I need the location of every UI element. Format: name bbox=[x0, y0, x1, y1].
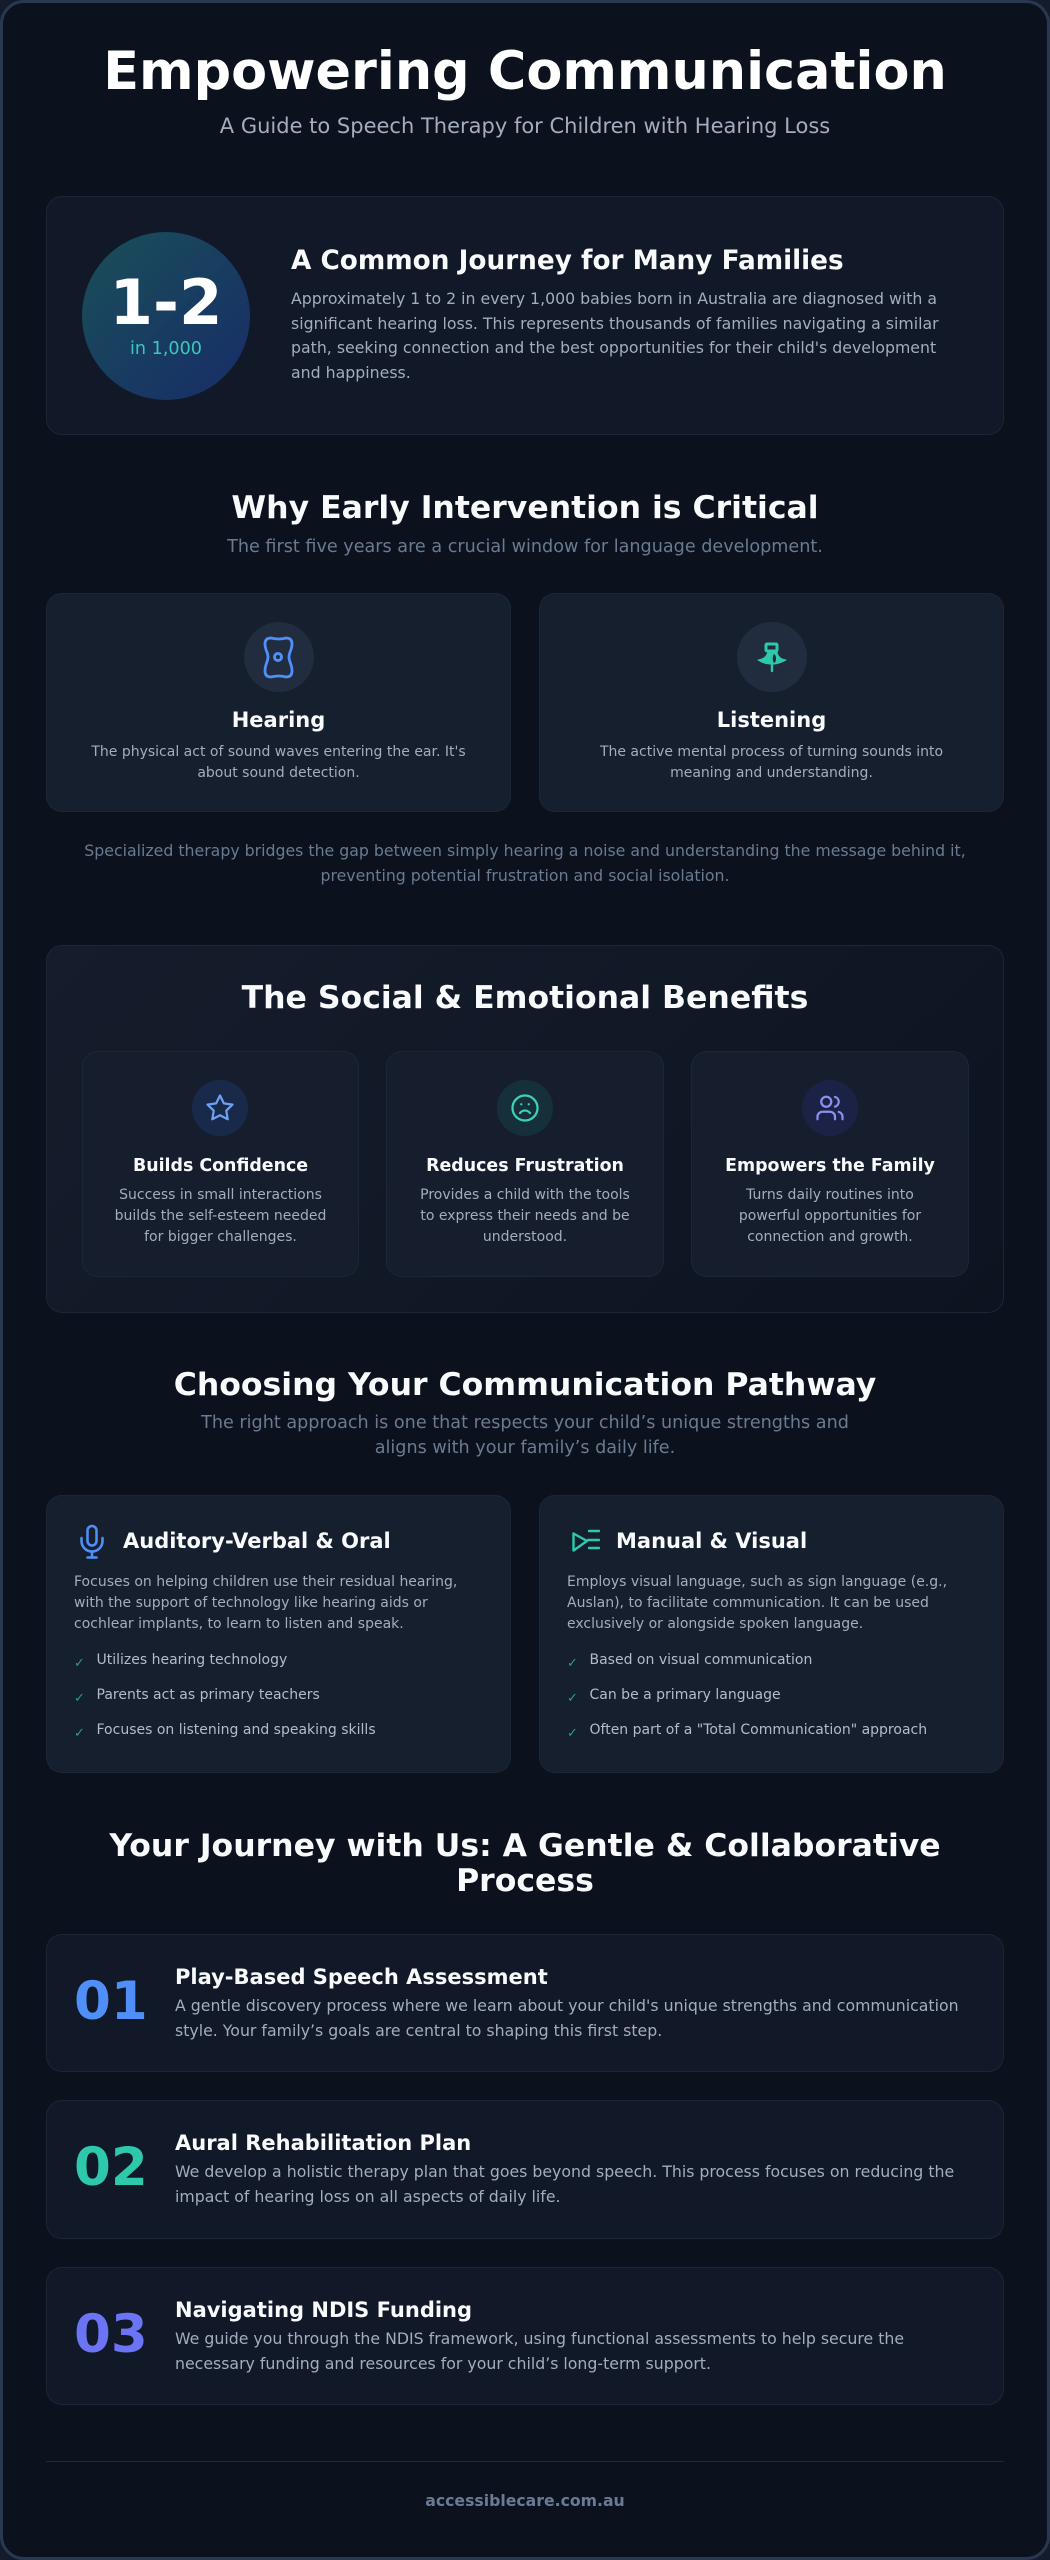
text: therapy bridge note bbox=[84, 841, 966, 884]
icon: family bbox=[802, 1080, 858, 1136]
title: Empowering Communication bbox=[103, 41, 947, 102]
panel: manual and visual bbox=[539, 1495, 1004, 1773]
step number 03: 03 bbox=[74, 2304, 148, 2365]
subtitle: A Guide to Speech Therapy for Children with Hearing Loss bbox=[220, 114, 830, 138]
text: listening description bbox=[600, 744, 943, 781]
statistic unit: in 1,000 bbox=[130, 339, 202, 359]
step title: Aural Rehabilitation Plan bbox=[175, 2131, 471, 2155]
subheading: why early intervention: The first five years are a crucial window for language development. bbox=[227, 537, 823, 557]
text: auditory-verbal description: Focuses on helping children use their residual hearing, bbox=[74, 1574, 457, 1590]
heading: hearing: Hearing bbox=[232, 708, 325, 732]
footer: website: accessiblecare.com.au bbox=[425, 2491, 625, 2510]
statistic circle: 1-2 in 1,000 bbox=[82, 232, 250, 400]
heading: benefits: The Social & Emotional Benefits bbox=[242, 980, 808, 1016]
subheading: communication pathway: aligns with your family’s daily life. bbox=[375, 1438, 675, 1458]
title: builds confidence: Builds Confidence bbox=[133, 1156, 308, 1176]
list item: Often part of a "Total Communication" approach bbox=[590, 1722, 927, 1738]
step description: style. Your family’s goals are central to shaping this first step. bbox=[175, 2020, 662, 2040]
step description: necessary funding and resources for your child’s long-term support. bbox=[175, 2354, 711, 2372]
step description: We develop a holistic therapy plan that goes beyond speech. This process focuses on reducing the bbox=[175, 2162, 954, 2181]
heading: auditory-verbal and oral: Auditory-Verbal & Oral bbox=[123, 1529, 391, 1553]
list item: ✓ bbox=[567, 1656, 578, 1671]
text: therapy bridge note: preventing potential frustration and social isolation. bbox=[320, 866, 730, 884]
list item: Can be a primary language bbox=[590, 1687, 781, 1703]
text: reduces frustration description: Provides a child with the tools bbox=[420, 1187, 630, 1203]
panel: common journey statistic bbox=[46, 196, 1004, 435]
heading: your journey bbox=[109, 1828, 941, 1899]
text: auditory-verbal description: with the support of technology like hearing aids or bbox=[74, 1595, 428, 1611]
text: builds confidence description: builds the self-esteem needed bbox=[115, 1208, 326, 1224]
panel: step 1 bbox=[46, 1934, 1004, 2072]
list item: ✓ bbox=[567, 1726, 578, 1741]
list item: Parents act as primary teachers bbox=[96, 1687, 320, 1703]
text: auditory-verbal description: cochlear implants, to learn to listen and speak. bbox=[74, 1616, 404, 1632]
step description: We guide you through the NDIS framework, using functional assessments to help secure the bbox=[175, 2329, 904, 2348]
text: empowers the family description: Turns daily routines into bbox=[746, 1187, 914, 1203]
card: builds confidence bbox=[82, 1051, 359, 1277]
title: reduces frustration: Reduces Frustration bbox=[426, 1156, 624, 1176]
text: therapy bridge note: Specialized therapy bridges the gap between simply hearing a noise and understanding the message behind it, bbox=[84, 841, 966, 860]
step description bbox=[175, 2329, 904, 2372]
list item: ✓ bbox=[567, 1691, 578, 1706]
text: common journey description: and happiness. bbox=[291, 362, 411, 382]
step description: A gentle discovery process where we learn about your child's unique strengths and communication bbox=[175, 1996, 959, 2015]
subheading: communication pathway bbox=[201, 1413, 849, 1458]
icon: hearing bbox=[244, 622, 314, 692]
panel: step 3 bbox=[46, 2267, 1004, 2405]
icon: visual language bbox=[572, 1530, 600, 1552]
text: manual and visual description: Auslan), to facilitate communication. It can be used bbox=[567, 1595, 929, 1611]
text: hearing description bbox=[91, 744, 466, 781]
card: empowers the family bbox=[691, 1051, 969, 1277]
text: builds confidence description bbox=[115, 1187, 326, 1245]
text: listening description: The active mental process of turning sounds into bbox=[600, 744, 943, 760]
step number 02: 02 bbox=[74, 2137, 148, 2198]
text: common journey description: Approximately 1 to 2 in every 1,000 babies born in Australia are diagnosed with a bbox=[291, 289, 937, 308]
text: hearing description: about sound detection. bbox=[197, 765, 360, 781]
text: manual and visual description: exclusively or alongside spoken language. bbox=[567, 1616, 863, 1632]
text: empowers the family description: connection and growth. bbox=[747, 1229, 913, 1245]
step description bbox=[175, 1996, 959, 2040]
heading: why early intervention: Why Early Intervention is Critical bbox=[231, 490, 819, 526]
text: reduces frustration description: to express their needs and be bbox=[420, 1208, 630, 1224]
icon: microphone bbox=[80, 1524, 104, 1559]
text: builds confidence description: Success in small interactions bbox=[119, 1187, 322, 1203]
heading: your journey: Your Journey with Us: A Gentle & Collaborative bbox=[109, 1828, 941, 1864]
icon: frown bbox=[497, 1080, 553, 1136]
text: builds confidence description: for bigger challenges. bbox=[144, 1229, 297, 1245]
text: reduces frustration description: understood. bbox=[483, 1229, 567, 1245]
heading: your journey: Process bbox=[456, 1863, 594, 1899]
list item: Utilizes hearing technology bbox=[96, 1652, 287, 1668]
text: common journey description: significant hearing loss. This represents thousands of families navigating a similar bbox=[291, 314, 939, 332]
text: manual and visual description bbox=[567, 1574, 947, 1632]
heading: communication pathway: Choosing Your Communication Pathway bbox=[174, 1367, 876, 1403]
panel: listening bbox=[539, 593, 1004, 812]
heading: manual and visual: Manual & Visual bbox=[616, 1529, 807, 1553]
panel: hearing bbox=[46, 593, 511, 812]
step description bbox=[175, 2162, 954, 2206]
step title: Navigating NDIS Funding bbox=[175, 2298, 472, 2322]
text: hearing description: The physical act of sound waves entering the ear. It's bbox=[91, 744, 466, 760]
statistic number: 1-2 bbox=[110, 266, 222, 339]
heading: listening: Listening bbox=[717, 708, 826, 732]
list item: ✓ bbox=[74, 1691, 85, 1706]
text: manual and visual description: Employs visual language, such as sign language (e.g., bbox=[567, 1574, 947, 1590]
text: empowers the family description bbox=[739, 1187, 922, 1245]
step description: impact of hearing loss on all aspects of daily life. bbox=[175, 2186, 561, 2206]
card: reduces frustration bbox=[386, 1051, 664, 1277]
list: manual and visual features bbox=[567, 1652, 927, 1741]
panel: step 2 bbox=[46, 2100, 1004, 2239]
list item: Focuses on listening and speaking skills bbox=[96, 1722, 376, 1738]
list item: Based on visual communication bbox=[590, 1652, 812, 1668]
text: empowers the family description: powerful opportunities for bbox=[739, 1208, 921, 1224]
text: common journey description bbox=[291, 289, 939, 382]
list item: ✓ bbox=[74, 1726, 85, 1741]
list item: ✓ bbox=[74, 1656, 85, 1671]
title: empowers the family: Empowers the Family bbox=[725, 1156, 935, 1176]
text: listening description: meaning and understanding. bbox=[670, 765, 873, 781]
heading: common journey: A Common Journey for Many Families bbox=[291, 246, 844, 276]
step number 01: 01 bbox=[74, 1971, 148, 2032]
step title: Play-Based Speech Assessment bbox=[175, 1965, 548, 1989]
icon: star bbox=[192, 1080, 248, 1136]
panel: social and emotional benefits bbox=[46, 945, 1004, 1313]
text: auditory-verbal description bbox=[74, 1574, 457, 1632]
list: auditory-verbal features bbox=[74, 1652, 376, 1741]
text: reduces frustration description bbox=[420, 1187, 630, 1245]
text: common journey description: path, seeking connection and the best opportunities for their child's development bbox=[291, 338, 936, 357]
panel: auditory-verbal and oral bbox=[46, 1495, 511, 1773]
subheading: communication pathway: The right approach is one that respects your child’s unique strengths and bbox=[201, 1413, 849, 1433]
icon: listening bbox=[737, 622, 807, 692]
